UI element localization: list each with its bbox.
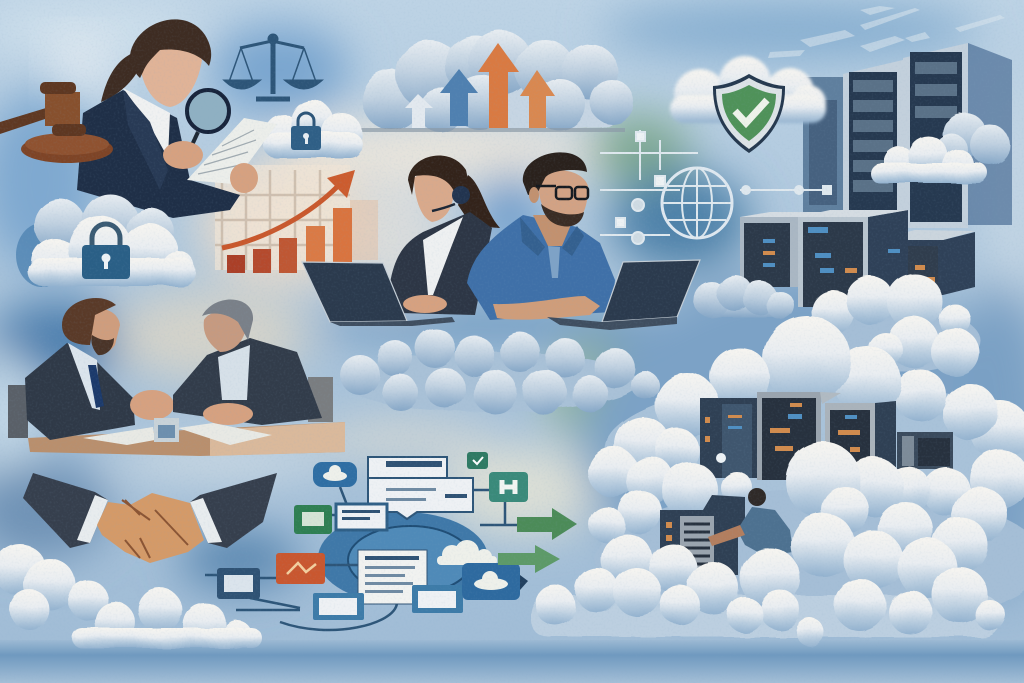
cloud: small centre right xyxy=(694,275,794,319)
cloud: shield cloud xyxy=(670,56,826,153)
central cloud shape xyxy=(318,512,488,604)
laptop: right xyxy=(547,260,700,330)
left man suit xyxy=(25,343,135,440)
rack C xyxy=(875,232,975,295)
jacket xyxy=(77,90,240,218)
magnifier xyxy=(192,132,198,145)
technician head xyxy=(748,488,766,506)
ponytail xyxy=(458,175,500,228)
right man hands xyxy=(203,403,253,425)
icon: padlock small xyxy=(291,113,321,150)
document small xyxy=(336,504,387,530)
icon: cloud tag xyxy=(313,462,357,487)
collar xyxy=(520,217,545,256)
horizon strip under arrows xyxy=(345,128,625,132)
blazer xyxy=(390,212,492,315)
icon: gavel xyxy=(0,82,113,163)
panel: man with glasses xyxy=(467,152,615,320)
cloud: left padlock cloud xyxy=(16,194,196,287)
clouds: right lower bank xyxy=(589,442,1024,632)
icon: teal tile xyxy=(489,472,528,502)
face xyxy=(140,45,202,107)
paper xyxy=(187,118,277,184)
face xyxy=(414,171,454,222)
beard xyxy=(541,204,584,226)
circuit and globe xyxy=(600,130,831,244)
chairs xyxy=(8,385,28,438)
icon: scales of justice xyxy=(226,35,320,99)
right man face xyxy=(204,311,247,352)
card: bottom xyxy=(313,593,364,620)
hands xyxy=(403,295,447,313)
server racks: top right xyxy=(803,43,1012,228)
icon: check tag xyxy=(467,452,488,469)
icon: shield xyxy=(713,74,785,153)
icon: padlock large xyxy=(82,224,130,279)
arrow: green lower xyxy=(498,545,560,573)
headset xyxy=(452,186,470,204)
neck xyxy=(533,215,575,246)
card: left xyxy=(217,568,260,599)
panel: two men at table xyxy=(8,298,345,456)
laptop: left xyxy=(302,262,455,326)
rack B xyxy=(798,210,908,306)
glasses xyxy=(536,186,588,199)
clouds: bottom left xyxy=(0,544,262,649)
icon: growth arrows xyxy=(405,43,555,128)
clouds: right upper bank xyxy=(811,274,980,376)
left man face xyxy=(88,309,120,352)
hand on magnifier xyxy=(163,141,203,169)
handshake xyxy=(23,473,277,563)
technician body xyxy=(737,507,793,556)
document top xyxy=(368,457,447,493)
hair xyxy=(408,156,472,198)
technician arm xyxy=(708,525,745,546)
chart grid backdrop xyxy=(215,165,378,270)
card: bottom right xyxy=(412,585,463,613)
ponytail xyxy=(101,52,136,102)
right man suit xyxy=(173,338,322,425)
ear xyxy=(529,187,539,203)
led rows xyxy=(763,227,900,273)
flow diagram xyxy=(205,452,577,630)
table xyxy=(28,422,345,456)
panel: woman with headset xyxy=(390,156,500,315)
connector lines xyxy=(205,487,520,630)
icon: white cloud xyxy=(437,540,497,565)
server racks on cloud xyxy=(700,392,953,480)
papers and cup xyxy=(83,427,155,445)
hair xyxy=(130,19,211,78)
hair xyxy=(523,152,587,195)
clouds: centre band xyxy=(340,328,659,414)
arrow: green upper xyxy=(517,508,577,540)
bar chart with rising arrow xyxy=(222,170,355,273)
clouds: bottom front bank xyxy=(530,513,1005,646)
shirt xyxy=(467,215,615,320)
server racks: middle right xyxy=(740,210,975,307)
cloud: upper right xyxy=(870,113,1010,183)
left man hand xyxy=(130,390,174,420)
cloud: top left haze xyxy=(49,34,117,92)
icon: blue cloud tile xyxy=(462,563,528,600)
cloud: small padlock cloud xyxy=(264,100,362,158)
rack A xyxy=(740,217,798,287)
forearm xyxy=(493,296,600,320)
technician with servers xyxy=(660,488,793,576)
clouds: right mid bank xyxy=(588,316,1024,520)
icon: green card xyxy=(294,505,332,534)
face xyxy=(538,170,588,226)
cloud: top centre behind arrows xyxy=(362,30,634,132)
document wide xyxy=(368,478,473,519)
roof slats above servers xyxy=(768,6,1005,58)
document centre xyxy=(358,550,427,604)
card: orange chart xyxy=(276,553,325,584)
panel: lawyer with magnifier xyxy=(0,19,277,218)
hand on paper xyxy=(230,163,258,193)
